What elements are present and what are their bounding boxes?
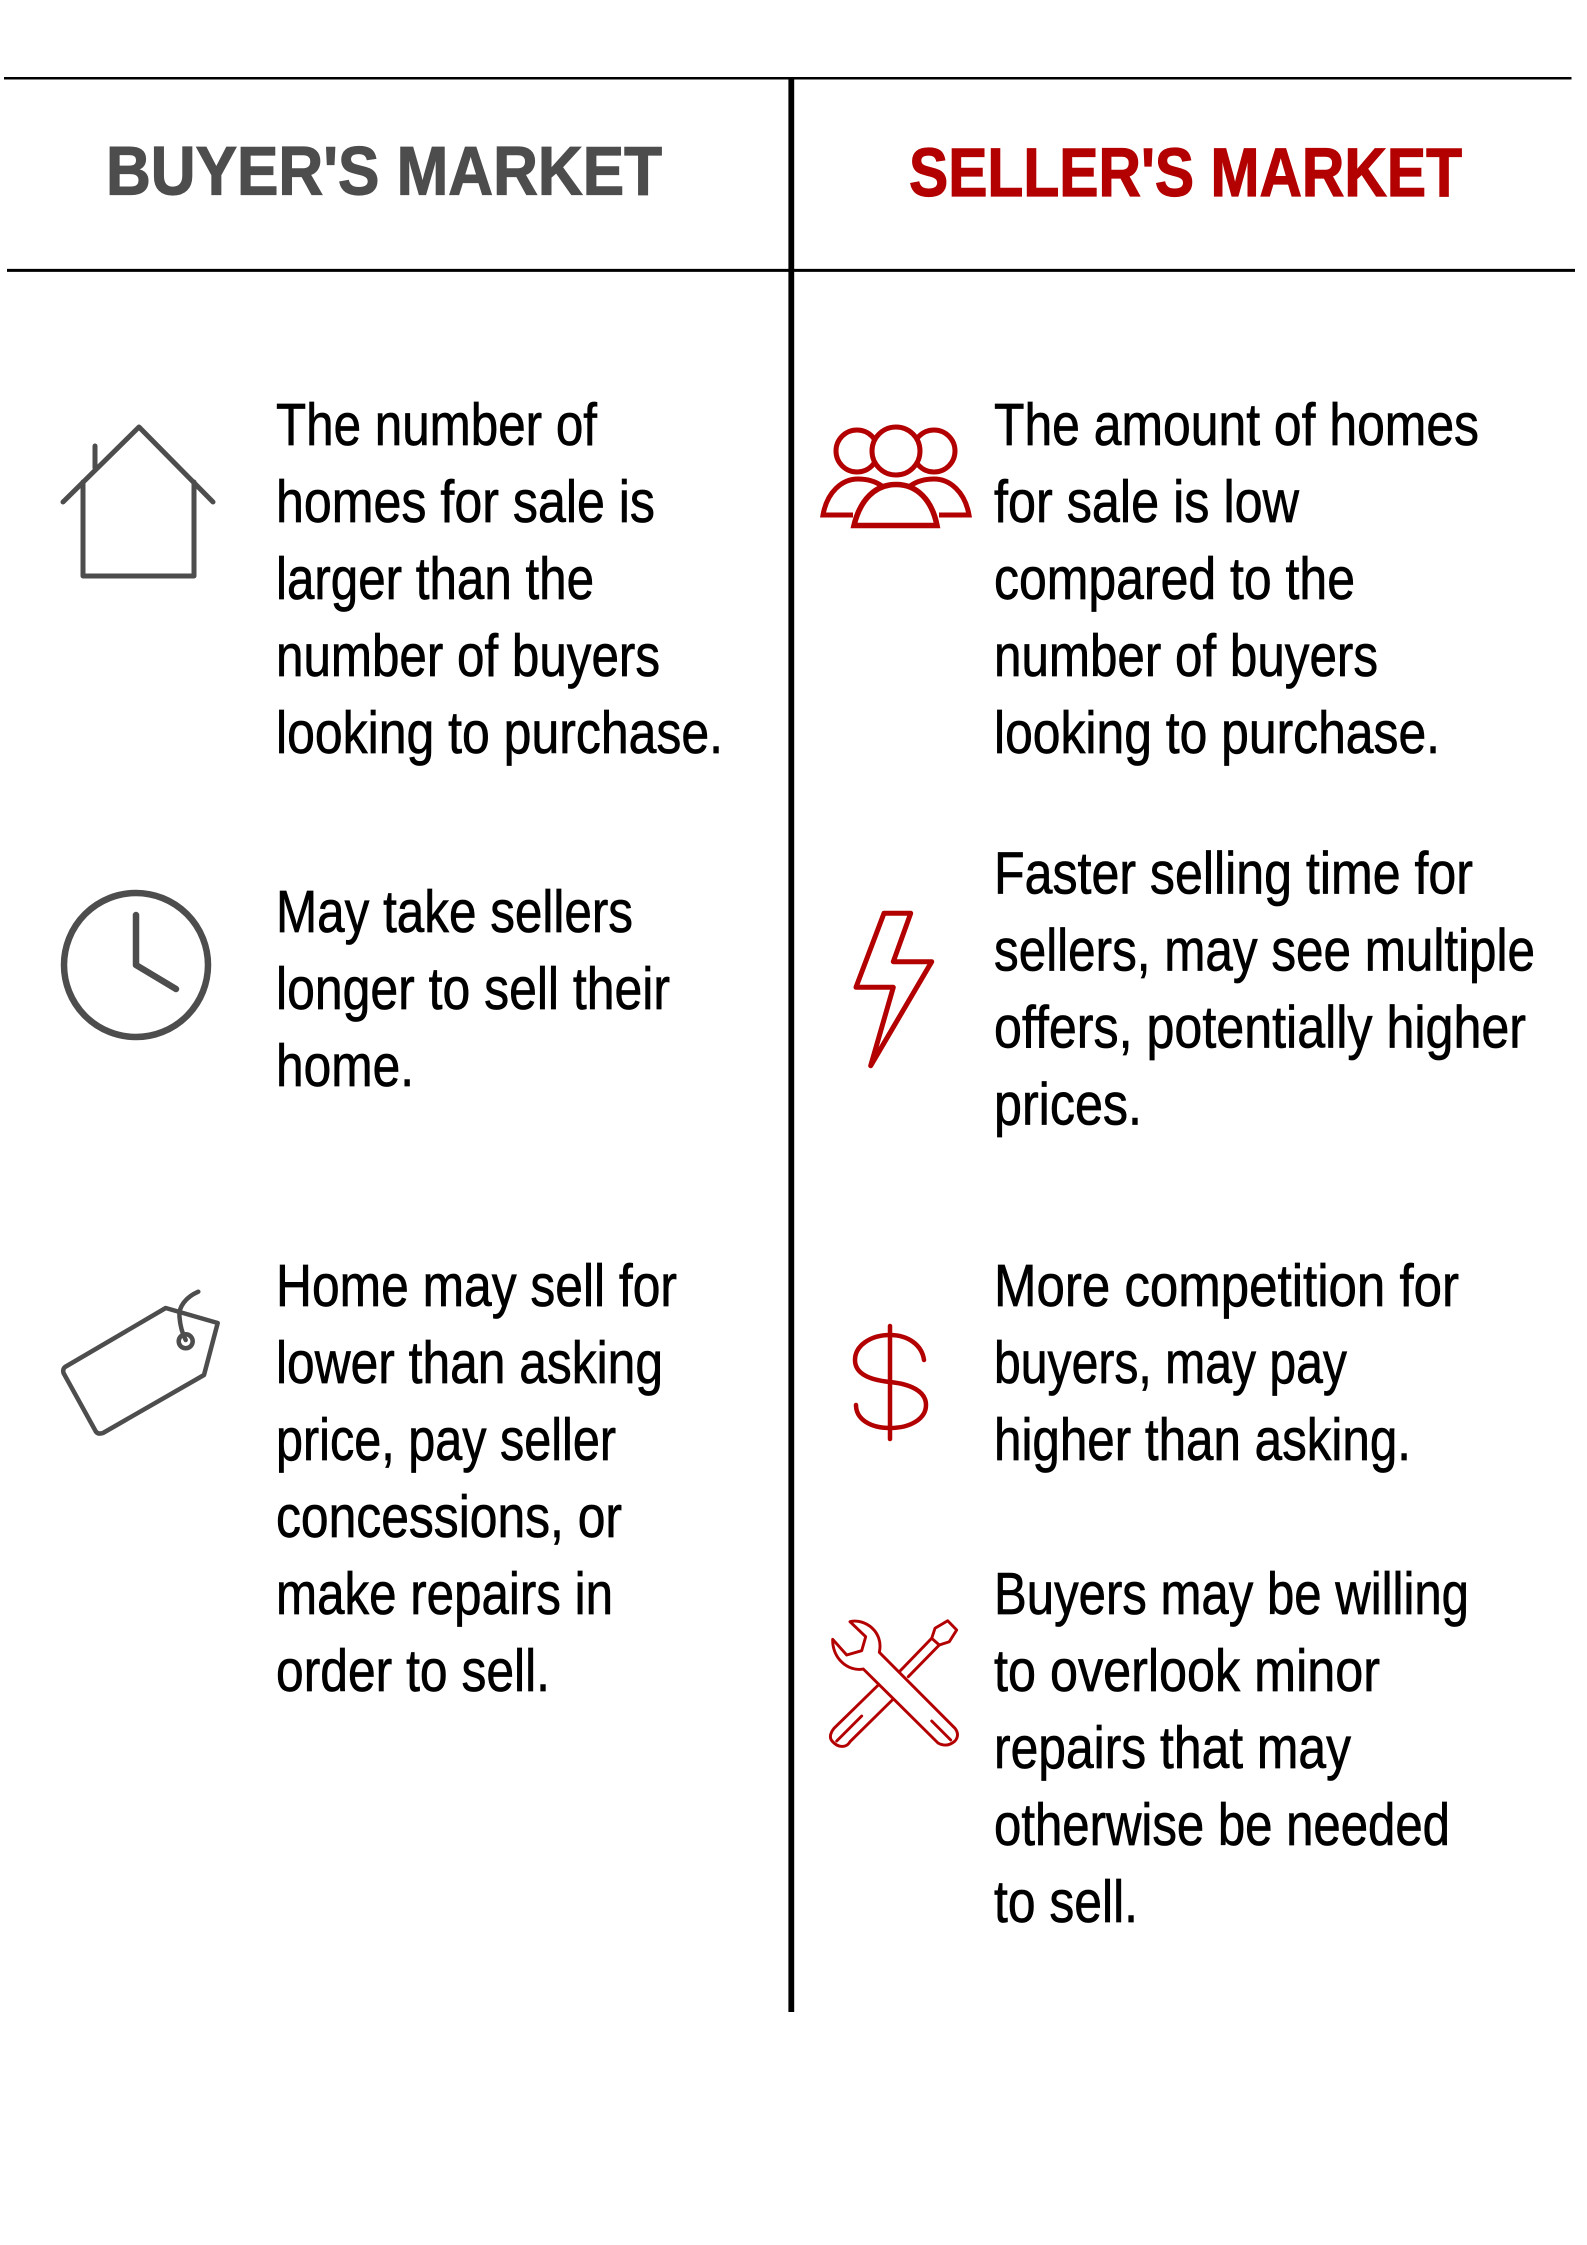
text: buyer point 1 [276,392,723,766]
text: seller point 2: prices. [994,1072,1142,1138]
icon: wrench and screwdriver [830,1621,958,1746]
text: seller point 1: The amount of homes [994,392,1479,458]
icon: house [63,427,213,576]
heading: seller's market: SELLER'S MARKET [909,134,1462,211]
text: seller point 2 [994,840,1535,1138]
text: seller point 3: buyers, may pay [994,1330,1347,1396]
text: seller point 2: Faster selling time for [994,840,1473,906]
text: buyer point 3: concessions, or [276,1484,622,1550]
text: buyer point 3: order to sell. [276,1638,550,1704]
text: buyer point 1: The number of [276,392,598,458]
text: seller point 1 [994,392,1479,766]
text: seller point 4: otherwise be needed [994,1792,1450,1858]
text: seller point 3: More competition for [994,1253,1459,1319]
icon: dollar sign [855,1326,926,1439]
icon: lightning bolt [856,913,932,1066]
icon: price tag [63,1292,218,1434]
text: seller point 3: higher than asking. [994,1407,1411,1473]
text: buyer point 3 [276,1253,677,1704]
text: buyer point 2: home. [276,1033,414,1099]
text: buyer point 3: lower than asking [276,1330,663,1396]
text: seller point 4: to sell. [994,1869,1138,1935]
text: buyer point 2: May take sellers [276,879,633,945]
text: seller point 1: looking to purchase. [994,700,1440,766]
text: seller point 4: to overlook minor [994,1638,1380,1704]
icon: group of people [823,427,969,526]
text: seller point 4: repairs that may [994,1715,1351,1781]
heading: buyer's market: BUYER'S MARKET [106,132,662,210]
text: buyer point 2: longer to sell their [276,956,670,1022]
text: buyer point 1: number of buyers [276,623,660,689]
icon: clock [64,893,208,1037]
text: buyer point 3: price, pay seller [276,1407,616,1473]
text: buyer point 1: homes for sale is [276,469,655,535]
text: buyer point 1: looking to purchase. [276,700,723,766]
text: seller point 1: compared to the [994,546,1355,612]
text: buyer point 3: Home may sell for [276,1253,677,1319]
text: seller point 4 [994,1561,1469,1935]
text: seller point 1: for sale is low [994,469,1299,535]
text: buyer point 2 [276,879,670,1099]
text: seller point 1: number of buyers [994,623,1378,689]
text: seller point 3 [994,1253,1459,1473]
text: buyer point 3: make repairs in [276,1561,613,1627]
text: buyer point 1: larger than the [276,546,594,612]
text: seller point 4: Buyers may be willing [994,1561,1469,1627]
